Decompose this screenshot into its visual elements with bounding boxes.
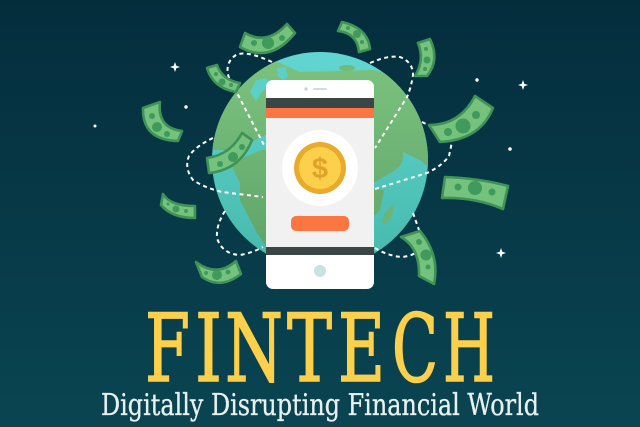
bill: lower right [401,231,435,284]
subtitle: Digitally Disrupting Financial World [101,388,539,423]
title: H [443,295,495,404]
bill: right lower [442,177,508,209]
home button [314,265,326,277]
money bills [143,22,508,284]
phone body [266,80,374,289]
bill: over globe [207,133,252,173]
bill: upper right small [415,39,434,76]
land: north [212,62,428,182]
phone [266,80,374,289]
title: T [287,295,332,404]
bill: right large [429,96,493,142]
bill: left [143,102,182,141]
bill: lower left small [161,194,195,218]
phone screen [266,118,374,247]
lower dark bar [266,247,374,255]
bill: top [240,24,295,53]
title: I [195,295,222,404]
coin halo [282,130,358,206]
title: C [392,295,438,404]
bill: bottom left [196,261,241,283]
title [145,295,495,404]
globe [212,52,428,254]
sea patches [250,78,269,101]
orange button [291,216,349,231]
orange bar [266,108,374,118]
dark bar [266,98,374,108]
dashed orbits [187,54,452,257]
land: south west [232,150,266,246]
land: south east [374,188,384,216]
bill: upper left small [207,65,240,92]
stars [94,62,528,258]
title: N [225,295,283,404]
dollar sign: $ [312,153,328,185]
coin [294,142,346,194]
title: E [338,295,385,404]
title: F [145,295,190,404]
phone speaker [304,87,308,91]
bill: top centre right [338,22,370,52]
